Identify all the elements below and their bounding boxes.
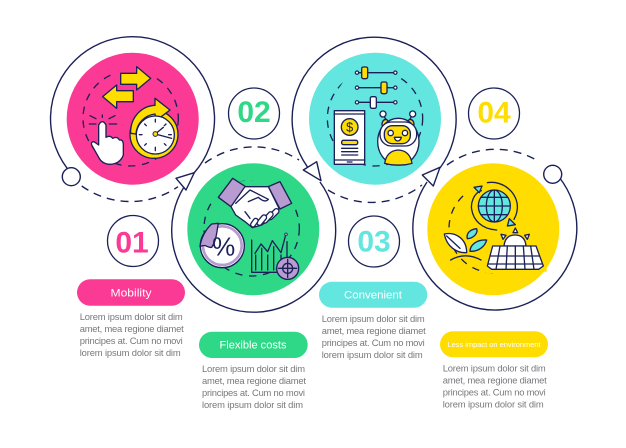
text block: less impact: lorem ipsum dolor sit dim [443, 399, 544, 410]
label: flexible costs: Flexible costs [220, 340, 287, 352]
icon: mobility [83, 67, 178, 166]
number 01: 01 [115, 226, 149, 259]
label: less impact on environment [440, 331, 548, 357]
number 01 [108, 216, 158, 266]
text block: convenient: lorem ipsum dolor sit dim [322, 349, 423, 360]
ring 3 outline [292, 37, 456, 202]
number 02 [228, 88, 280, 139]
text block: convenient: Lorem ipsum dolor sit dim [322, 313, 425, 324]
label: mobility: Mobility [110, 287, 152, 299]
text block: less impact [443, 363, 547, 410]
panel: mobility circle [67, 53, 199, 185]
text block: mobility: amet, mea regione diamet [80, 323, 184, 334]
number 04: 04 [477, 96, 511, 130]
text block: less impact: Lorem ipsum dolor sit dim [443, 363, 546, 374]
label: mobility [77, 279, 185, 306]
panel: convenient circle [309, 53, 441, 185]
icon: convenient: $ [346, 121, 353, 135]
text block: convenient: amet, mea regione diamet [322, 325, 426, 336]
text block: flexible costs: amet, mea regione diamet [202, 375, 306, 386]
text block: flexible costs: Lorem ipsum dolor sit dim [202, 363, 305, 374]
panel: flexible costs circle [187, 163, 319, 295]
panel: less impact circle [427, 163, 559, 295]
icon: flexible costs [200, 177, 299, 279]
arrow 2 [303, 162, 321, 181]
text block: mobility: lorem ipsum dolor sit dim [80, 347, 181, 358]
start marker [62, 168, 80, 186]
text block: less impact: principes at. Cum no movi [443, 387, 546, 398]
label: convenient [319, 282, 427, 308]
ring 2 outline [172, 147, 336, 312]
end marker [544, 165, 562, 183]
text block: flexible costs: lorem ipsum dolor sit dim [202, 399, 303, 410]
text block: convenient: principes at. Cum no movi [322, 337, 425, 348]
icon: environment [443, 177, 547, 273]
icon: flexible costs: % [212, 232, 235, 262]
number 03 [348, 216, 400, 267]
text block: mobility: principes at. Cum no movi [80, 335, 183, 346]
number 03: 03 [357, 226, 391, 259]
ring 4 outline [413, 149, 577, 310]
text block: flexible costs [202, 363, 306, 410]
text block: flexible costs: principes at. Cum no movi [202, 387, 305, 398]
number 02: 02 [237, 96, 271, 129]
text block: convenient [322, 313, 426, 360]
arrow 3 [422, 167, 440, 186]
number 04 [468, 88, 520, 139]
text block: mobility: Lorem ipsum dolor sit dim [80, 311, 183, 322]
label: less impact on environment: Less impact on environment [448, 342, 541, 349]
icon: convenient [327, 67, 423, 166]
label: flexible costs [199, 332, 308, 358]
text block: mobility [80, 311, 184, 358]
label: convenient: Convenient [344, 290, 402, 302]
arrow 1 [176, 173, 194, 190]
ring 1 outline [51, 37, 215, 202]
text block: less impact: amet, mea regione diamet [443, 375, 547, 386]
